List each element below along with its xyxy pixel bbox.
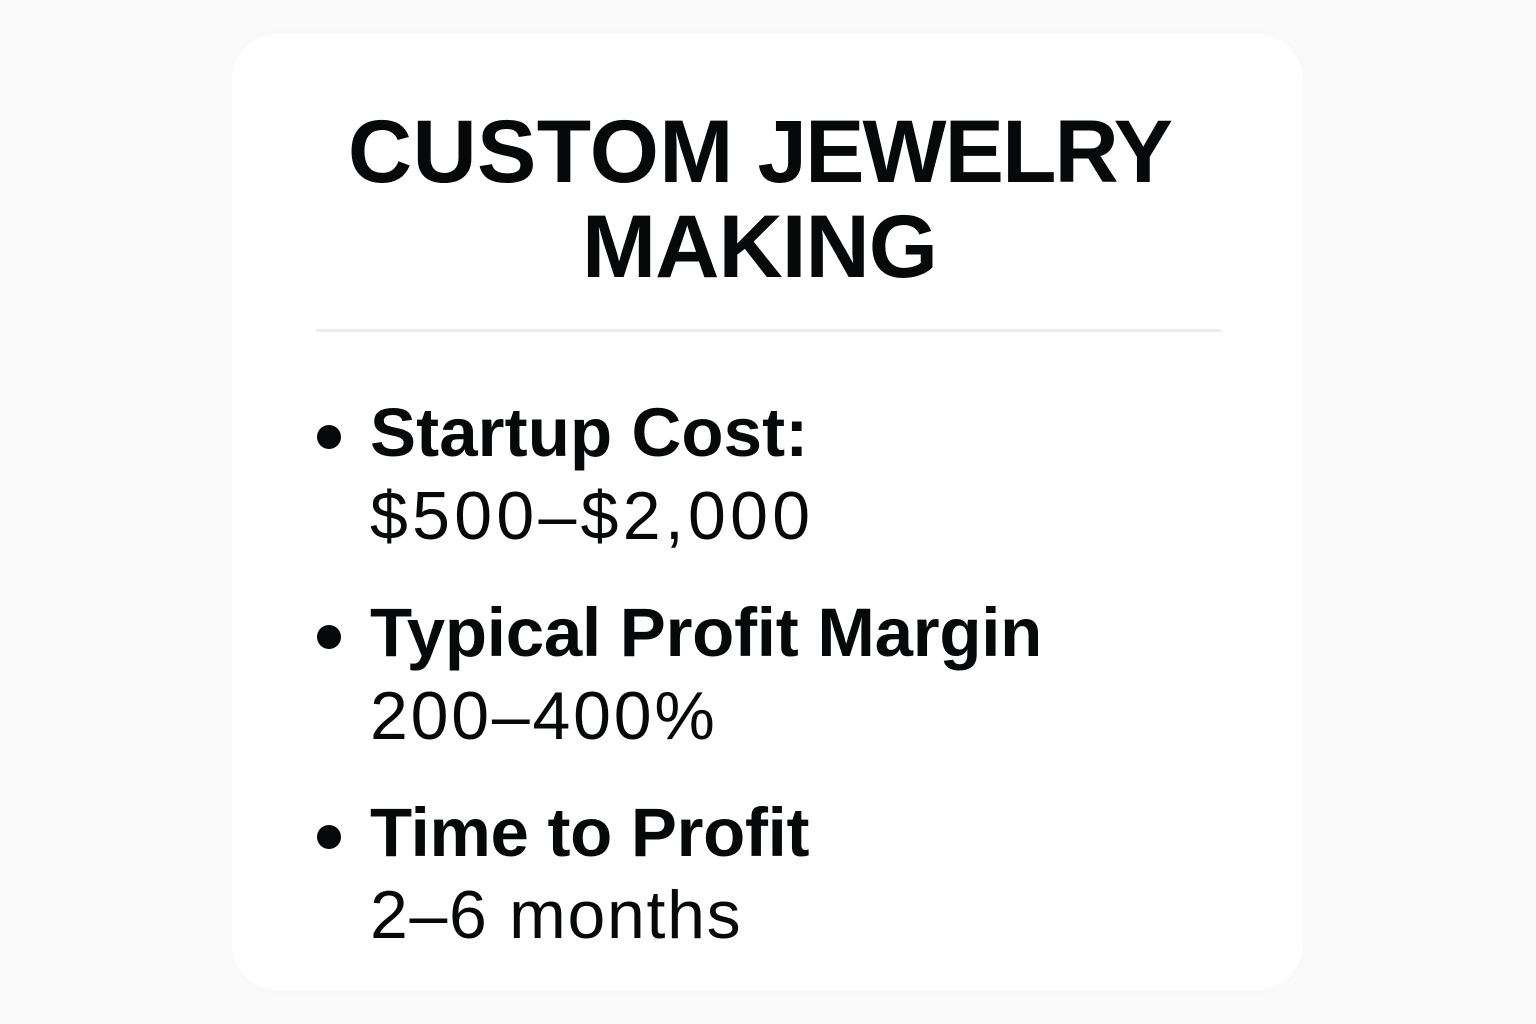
label: time to profit: Time to Profit: [370, 794, 809, 871]
title: [348, 101, 1172, 296]
list item: profit margin: [317, 594, 1042, 754]
panel: card: [232, 34, 1303, 990]
list item: time to profit: [317, 794, 809, 953]
title: MAKING: [582, 196, 937, 296]
label: profit margin: Typical Profit Margin: [370, 594, 1042, 671]
bullet: [317, 825, 341, 849]
bullet: [317, 625, 341, 649]
value: startup cost: $500–$2,000: [370, 478, 814, 554]
title: CUSTOM JEWELRY: [348, 101, 1171, 201]
bullet: [317, 425, 341, 449]
label: startup cost: Startup Cost:: [370, 394, 808, 471]
list item: startup cost: [317, 394, 814, 554]
value: profit margin: 200–400%: [370, 678, 718, 754]
value: time to profit: 2–6 months: [370, 877, 742, 953]
